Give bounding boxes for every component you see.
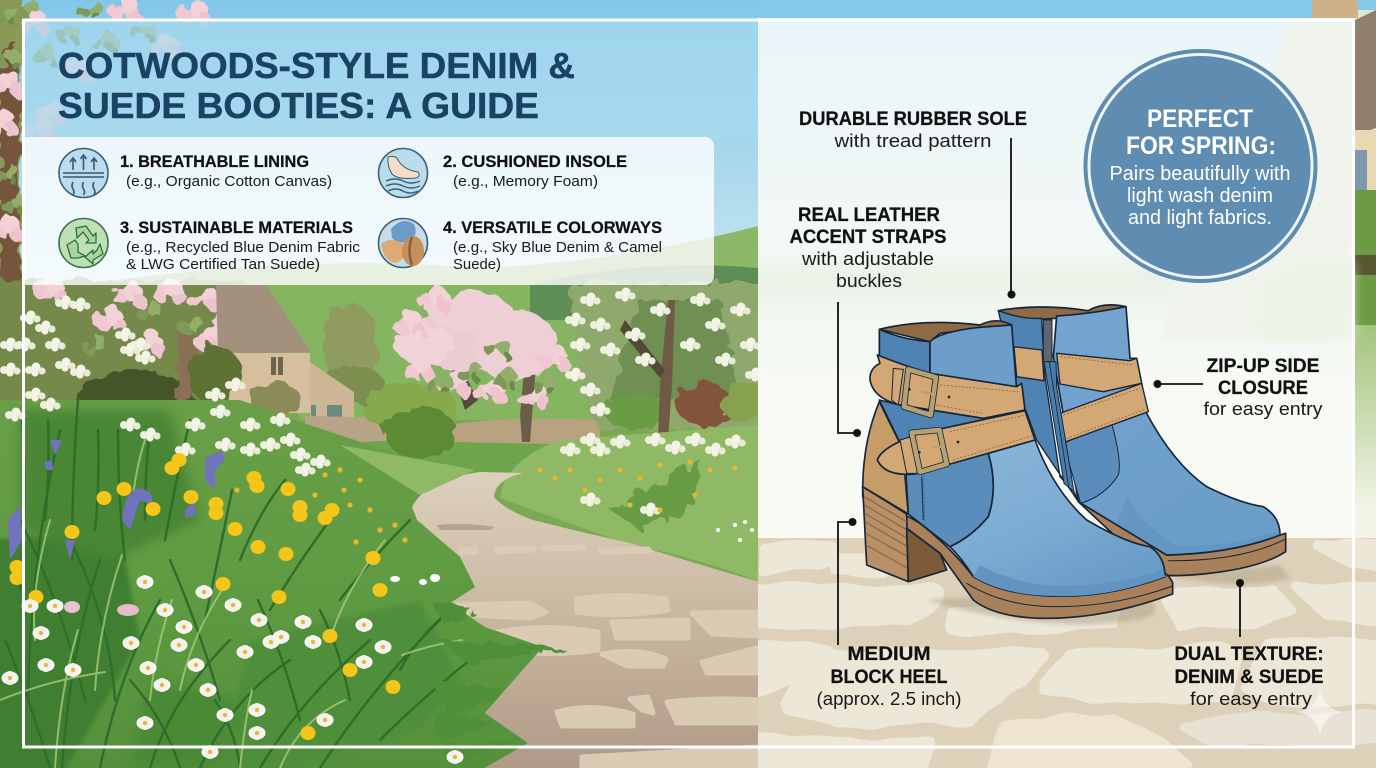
callout: block heel: MEDIUM xyxy=(848,643,930,665)
rear boot xyxy=(998,305,1286,576)
feature 4: versatile colorways: Suede) xyxy=(453,256,501,273)
upper right meadow xyxy=(500,425,760,582)
callout: zip-up closure xyxy=(1154,355,1323,419)
callout: dual texture: DUAL TEXTURE: xyxy=(1174,643,1324,665)
callout: zip-up closure: for easy entry xyxy=(1204,398,1323,419)
zipper xyxy=(1044,362,1074,492)
vamp xyxy=(950,440,1165,596)
callout: leather straps: REAL LEATHER xyxy=(798,204,940,226)
front shaft xyxy=(879,329,930,387)
sparkle xyxy=(1296,689,1344,736)
foreground meadow xyxy=(0,400,565,768)
boots illustration xyxy=(863,305,1286,618)
block heel xyxy=(863,487,908,582)
callout: perfect for spring: light wash denim xyxy=(1127,185,1273,207)
feature 3: sustainable materials: & LWG Certified Tan Suede) xyxy=(126,256,320,273)
callout: perfect for spring: Pairs beautifully with xyxy=(1110,163,1290,185)
buckles xyxy=(892,368,947,473)
callout: block heel xyxy=(816,518,962,709)
feature 3: sustainable materials: (e.g., Recycled Blue Denim Fabric xyxy=(126,239,361,256)
buckle pins xyxy=(922,392,942,447)
daisies xyxy=(2,574,464,764)
panel: features xyxy=(25,137,714,285)
feature 1: breathable lining: (e.g., Organic Cotton Canvas) xyxy=(126,173,332,190)
icon: cushioned insole xyxy=(378,148,428,198)
paving stones xyxy=(750,538,1376,768)
callout: dual texture: DENIM & SUEDE xyxy=(1174,666,1324,688)
icon: breathable lining xyxy=(59,148,108,198)
feature 3: sustainable materials: 3. SUSTAINABLE MATERIALS xyxy=(120,218,353,237)
background tree xyxy=(320,303,384,405)
boot ground shadows xyxy=(925,565,1290,624)
rear collar xyxy=(998,305,1126,319)
buttercups xyxy=(10,453,408,740)
iris flowers xyxy=(8,440,225,560)
callout: leather straps: ACCENT STRAPS xyxy=(790,226,946,248)
garden path xyxy=(412,472,760,768)
pink blossom tree xyxy=(393,286,571,442)
top-left blossom branches xyxy=(0,0,211,320)
icon: recycling xyxy=(59,218,108,268)
icon: color swatches xyxy=(378,218,428,268)
feature 4: versatile colorways: 4. VERSATILE COLORWAYS xyxy=(443,218,662,237)
callout: perfect for spring xyxy=(1084,49,1318,283)
blossom tree left xyxy=(0,276,250,430)
cottage xyxy=(189,285,354,418)
callout: block heel: BLOCK HEEL xyxy=(830,666,948,688)
hedge and walls xyxy=(300,382,600,480)
callout: rubber sole: DURABLE RUBBER SOLE xyxy=(799,108,1027,130)
lower strap xyxy=(877,411,1035,474)
rear upper xyxy=(1053,307,1280,555)
callout: rubber sole: with tread pattern xyxy=(833,130,992,151)
hills xyxy=(0,226,758,330)
grass blades xyxy=(5,400,470,768)
panel: right product area xyxy=(750,0,1376,768)
callout: leather straps: buckles xyxy=(836,270,902,291)
inner panel xyxy=(906,453,993,547)
rear sole xyxy=(1078,502,1286,576)
upper strap xyxy=(870,355,1025,418)
front boot xyxy=(863,321,1173,618)
feature 2: cushioned insole: 2. CUSHIONED INSOLE xyxy=(443,152,627,171)
callout: block heel: (approx. 2.5 inch) xyxy=(816,688,962,709)
feature 2: cushioned insole: (e.g., Memory Foam) xyxy=(453,173,598,190)
feature 1: breathable lining: 1. BREATHABLE LINING xyxy=(120,152,309,171)
faint scenery xyxy=(758,22,1355,350)
feature 3: sustainable materials xyxy=(59,218,361,273)
title: COTWOODS-STYLE DENIM & xyxy=(58,45,575,86)
front collar xyxy=(879,321,1012,342)
callout: leather straps: with adjustable xyxy=(801,248,934,269)
sky xyxy=(0,0,1376,320)
callout: perfect for spring: and light fabrics. xyxy=(1128,207,1272,229)
panel background xyxy=(758,18,1355,545)
small meadow flowers right xyxy=(537,432,754,542)
rear straps xyxy=(1014,347,1044,381)
callout: zip-up closure: ZIP-UP SIDE xyxy=(1206,355,1320,377)
callout: rubber sole xyxy=(799,108,1027,298)
callout: zip-up closure: CLOSURE xyxy=(1218,377,1308,399)
feature 4: versatile colorways: (e.g., Sky Blue Denim & Camel xyxy=(453,239,662,256)
cow parsley xyxy=(0,296,331,477)
callout: dual texture xyxy=(1174,579,1324,709)
feature 1: breathable lining xyxy=(59,148,332,198)
right side scene outside the frame xyxy=(1312,0,1376,768)
white orchard tree xyxy=(572,283,769,430)
callout: perfect for spring: PERFECT xyxy=(1147,105,1253,133)
callout: leather straps xyxy=(790,204,946,437)
feature 4: versatile colorways xyxy=(378,218,662,273)
title: SUEDE BOOTIES: A GUIDE xyxy=(58,85,539,126)
front sole xyxy=(863,487,1173,618)
callout: dual texture: for easy entry xyxy=(1190,688,1313,709)
heel counter suede xyxy=(863,402,908,514)
feature 2: cushioned insole xyxy=(378,148,627,198)
callout: perfect for spring: FOR SPRING: xyxy=(1126,132,1276,160)
title xyxy=(58,45,575,126)
title area wash xyxy=(22,21,758,138)
